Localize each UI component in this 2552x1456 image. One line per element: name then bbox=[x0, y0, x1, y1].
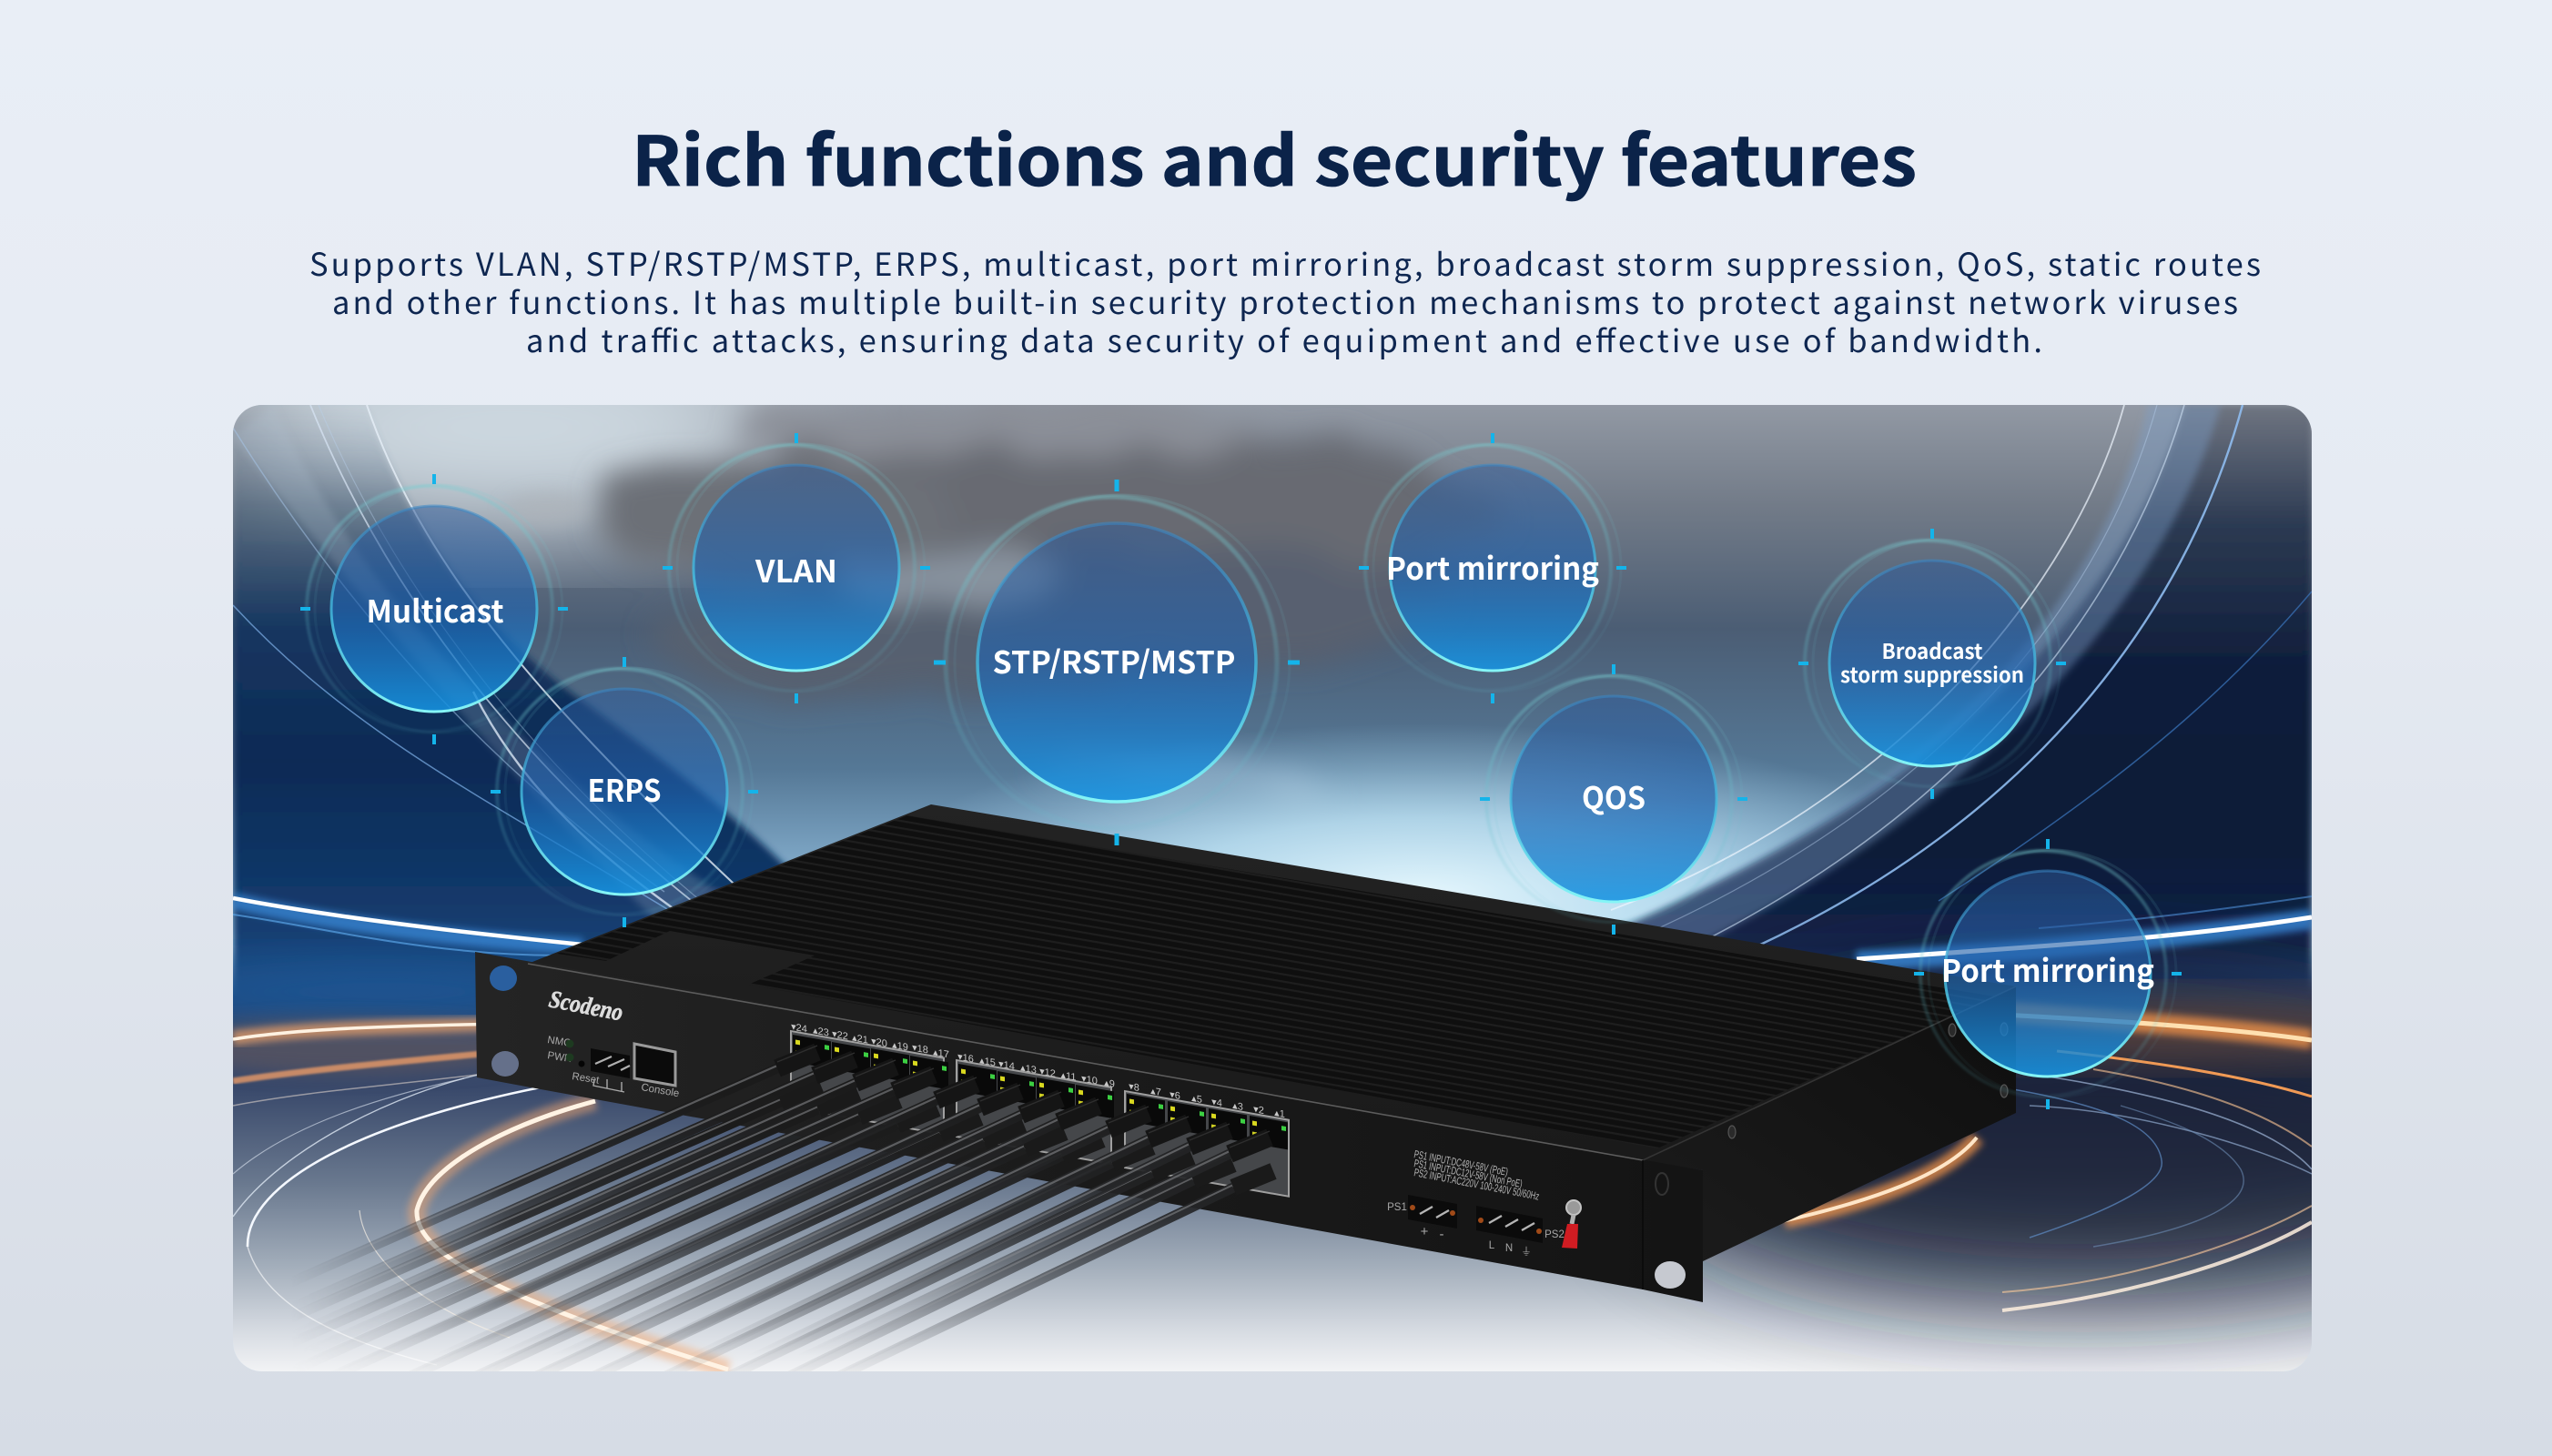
switch front panel bbox=[475, 952, 1703, 1302]
power ratings text: PS1 INPUT:DC12V-58V (Non PoE) bbox=[1413, 1157, 1524, 1190]
status LEDs and console: PWR bbox=[547, 1050, 572, 1065]
circle: VLAN: VLAN bbox=[754, 547, 837, 592]
swoosh left bbox=[233, 405, 734, 915]
title: Rich functions and security features bbox=[632, 106, 1917, 206]
heat-sink ribs bbox=[557, 815, 1994, 1148]
power connectors: PS2 bbox=[1544, 1229, 1565, 1240]
circle: Broadcast storm suppression: Broadcast bbox=[1882, 634, 1983, 665]
description paragraph: Supports VLAN, STP/RSTP/MSTP, ERPS, multicast, port mirroring, broadcast storm suppression, QoS, static routes bbox=[309, 239, 2261, 285]
status LEDs and console: NMC bbox=[547, 1035, 572, 1049]
port labels: ▾18 bbox=[912, 1043, 928, 1057]
sky light upper left bbox=[237, 328, 783, 528]
circle: VLAN bbox=[663, 433, 930, 703]
port labels: ▾6 bbox=[1170, 1089, 1180, 1102]
navy wedge left bbox=[233, 420, 788, 994]
dark lower right area bbox=[1629, 978, 2539, 1297]
port labels: ▴7 bbox=[1150, 1086, 1161, 1098]
circle: Port mirroring lower right bbox=[1914, 839, 2182, 1109]
port labels bbox=[791, 1022, 1285, 1120]
circle: ERPS bbox=[491, 657, 758, 927]
port labels: ▾22 bbox=[832, 1029, 848, 1043]
port labels: ▴17 bbox=[933, 1047, 949, 1061]
port labels: ▾14 bbox=[998, 1059, 1015, 1073]
network switch bbox=[49, 804, 2016, 1449]
description paragraph: and other functions. It has multiple built-in security protection mechanisms to protect against network viruses bbox=[332, 278, 2238, 323]
network cables bbox=[49, 1046, 1273, 1449]
port labels: ▾2 bbox=[1253, 1104, 1264, 1117]
circle: Broadcast storm suppression: storm suppression bbox=[1840, 658, 2024, 689]
circle: QOS: QOS bbox=[1582, 774, 1646, 818]
switch shadow-side panel bbox=[1643, 986, 2016, 1261]
side screws bbox=[1728, 1023, 2008, 1138]
port labels: ▾16 bbox=[957, 1052, 974, 1066]
port labels: ▴9 bbox=[1104, 1077, 1115, 1090]
description paragraph bbox=[309, 239, 2261, 361]
port labels: ▴13 bbox=[1020, 1063, 1037, 1077]
port labels: ▴19 bbox=[892, 1040, 908, 1054]
status LEDs and console: Reset bbox=[572, 1071, 601, 1087]
port frames bbox=[791, 1031, 1289, 1197]
bright horizon glow bbox=[979, 733, 1843, 923]
brand logo: Scodeno bbox=[547, 985, 625, 1026]
edge highlights bbox=[528, 964, 2016, 1289]
port labels: ▾8 bbox=[1129, 1081, 1139, 1094]
rack ear holes bbox=[490, 966, 1686, 1289]
description paragraph: and traffic attacks, ensuring data security of equipment and effective use of bandwidth. bbox=[526, 316, 2042, 361]
port labels: ▴3 bbox=[1232, 1100, 1243, 1113]
switch top plate bbox=[528, 804, 2016, 1160]
panel: sky background bbox=[233, 405, 2312, 1371]
circle: ERPS: ERPS bbox=[588, 766, 661, 811]
navy wedge right bbox=[1602, 405, 2312, 1010]
port labels: ▾10 bbox=[1081, 1074, 1098, 1087]
white streak right bbox=[1857, 896, 2312, 961]
port labels: ▴23 bbox=[813, 1026, 829, 1039]
port labels: ▴15 bbox=[979, 1056, 996, 1069]
power connectors: + bbox=[1421, 1224, 1429, 1239]
circle: STP/RSTP/MSTP bbox=[934, 480, 1300, 845]
power ratings text: PS2 INPUT:AC220V 100-240V 50/60Hz bbox=[1413, 1166, 1541, 1203]
power connectors: - bbox=[1440, 1227, 1443, 1242]
swoosh right bbox=[1602, 405, 2312, 965]
circle: QOS bbox=[1480, 664, 1747, 935]
circle: Multicast: Multicast bbox=[366, 587, 504, 632]
port labels: ▴21 bbox=[852, 1033, 868, 1046]
port labels: ▾4 bbox=[1211, 1097, 1222, 1109]
swirl arcs lower bbox=[233, 1074, 2312, 1370]
power connectors: ⏚ bbox=[1521, 1246, 1532, 1258]
circle: Broadcast storm suppression bbox=[1798, 529, 2066, 799]
power connectors: L bbox=[1489, 1240, 1495, 1251]
circle: Port mirroring bbox=[1359, 433, 1626, 703]
circle: Port mirroring lower right: Port mirroring bbox=[1941, 946, 2154, 991]
port labels: ▾20 bbox=[871, 1036, 887, 1050]
status LEDs and console: Console bbox=[640, 1082, 680, 1099]
port labels: ▴5 bbox=[1191, 1093, 1202, 1106]
lower gradient bbox=[233, 946, 2312, 1371]
clouds bbox=[610, 400, 1511, 790]
circle: Multicast bbox=[300, 474, 568, 744]
white streak left bbox=[233, 898, 582, 956]
port labels: ▴1 bbox=[1274, 1107, 1285, 1120]
power connectors: N bbox=[1505, 1243, 1513, 1254]
status LEDs and console bbox=[547, 1035, 680, 1099]
circle: STP/RSTP/MSTP: STP/RSTP/MSTP bbox=[992, 638, 1236, 682]
power ratings text bbox=[1413, 1148, 1541, 1203]
orange streaks right bbox=[2002, 1012, 2312, 1174]
port labels: ▴11 bbox=[1061, 1070, 1076, 1083]
circle: Port mirroring: Port mirroring bbox=[1386, 544, 1599, 589]
cloud rim highlight bbox=[505, 493, 587, 526]
power connectors: PS1 bbox=[1387, 1202, 1407, 1213]
power ratings text: PS1 INPUT:DC48V-58V (PoE) bbox=[1413, 1148, 1509, 1178]
RJ45 ports bbox=[793, 1035, 1288, 1149]
power connectors bbox=[1387, 1195, 1581, 1258]
orange streaks left bbox=[233, 1015, 477, 1107]
port labels: ▾24 bbox=[791, 1022, 807, 1036]
port labels: ▾12 bbox=[1039, 1067, 1056, 1080]
